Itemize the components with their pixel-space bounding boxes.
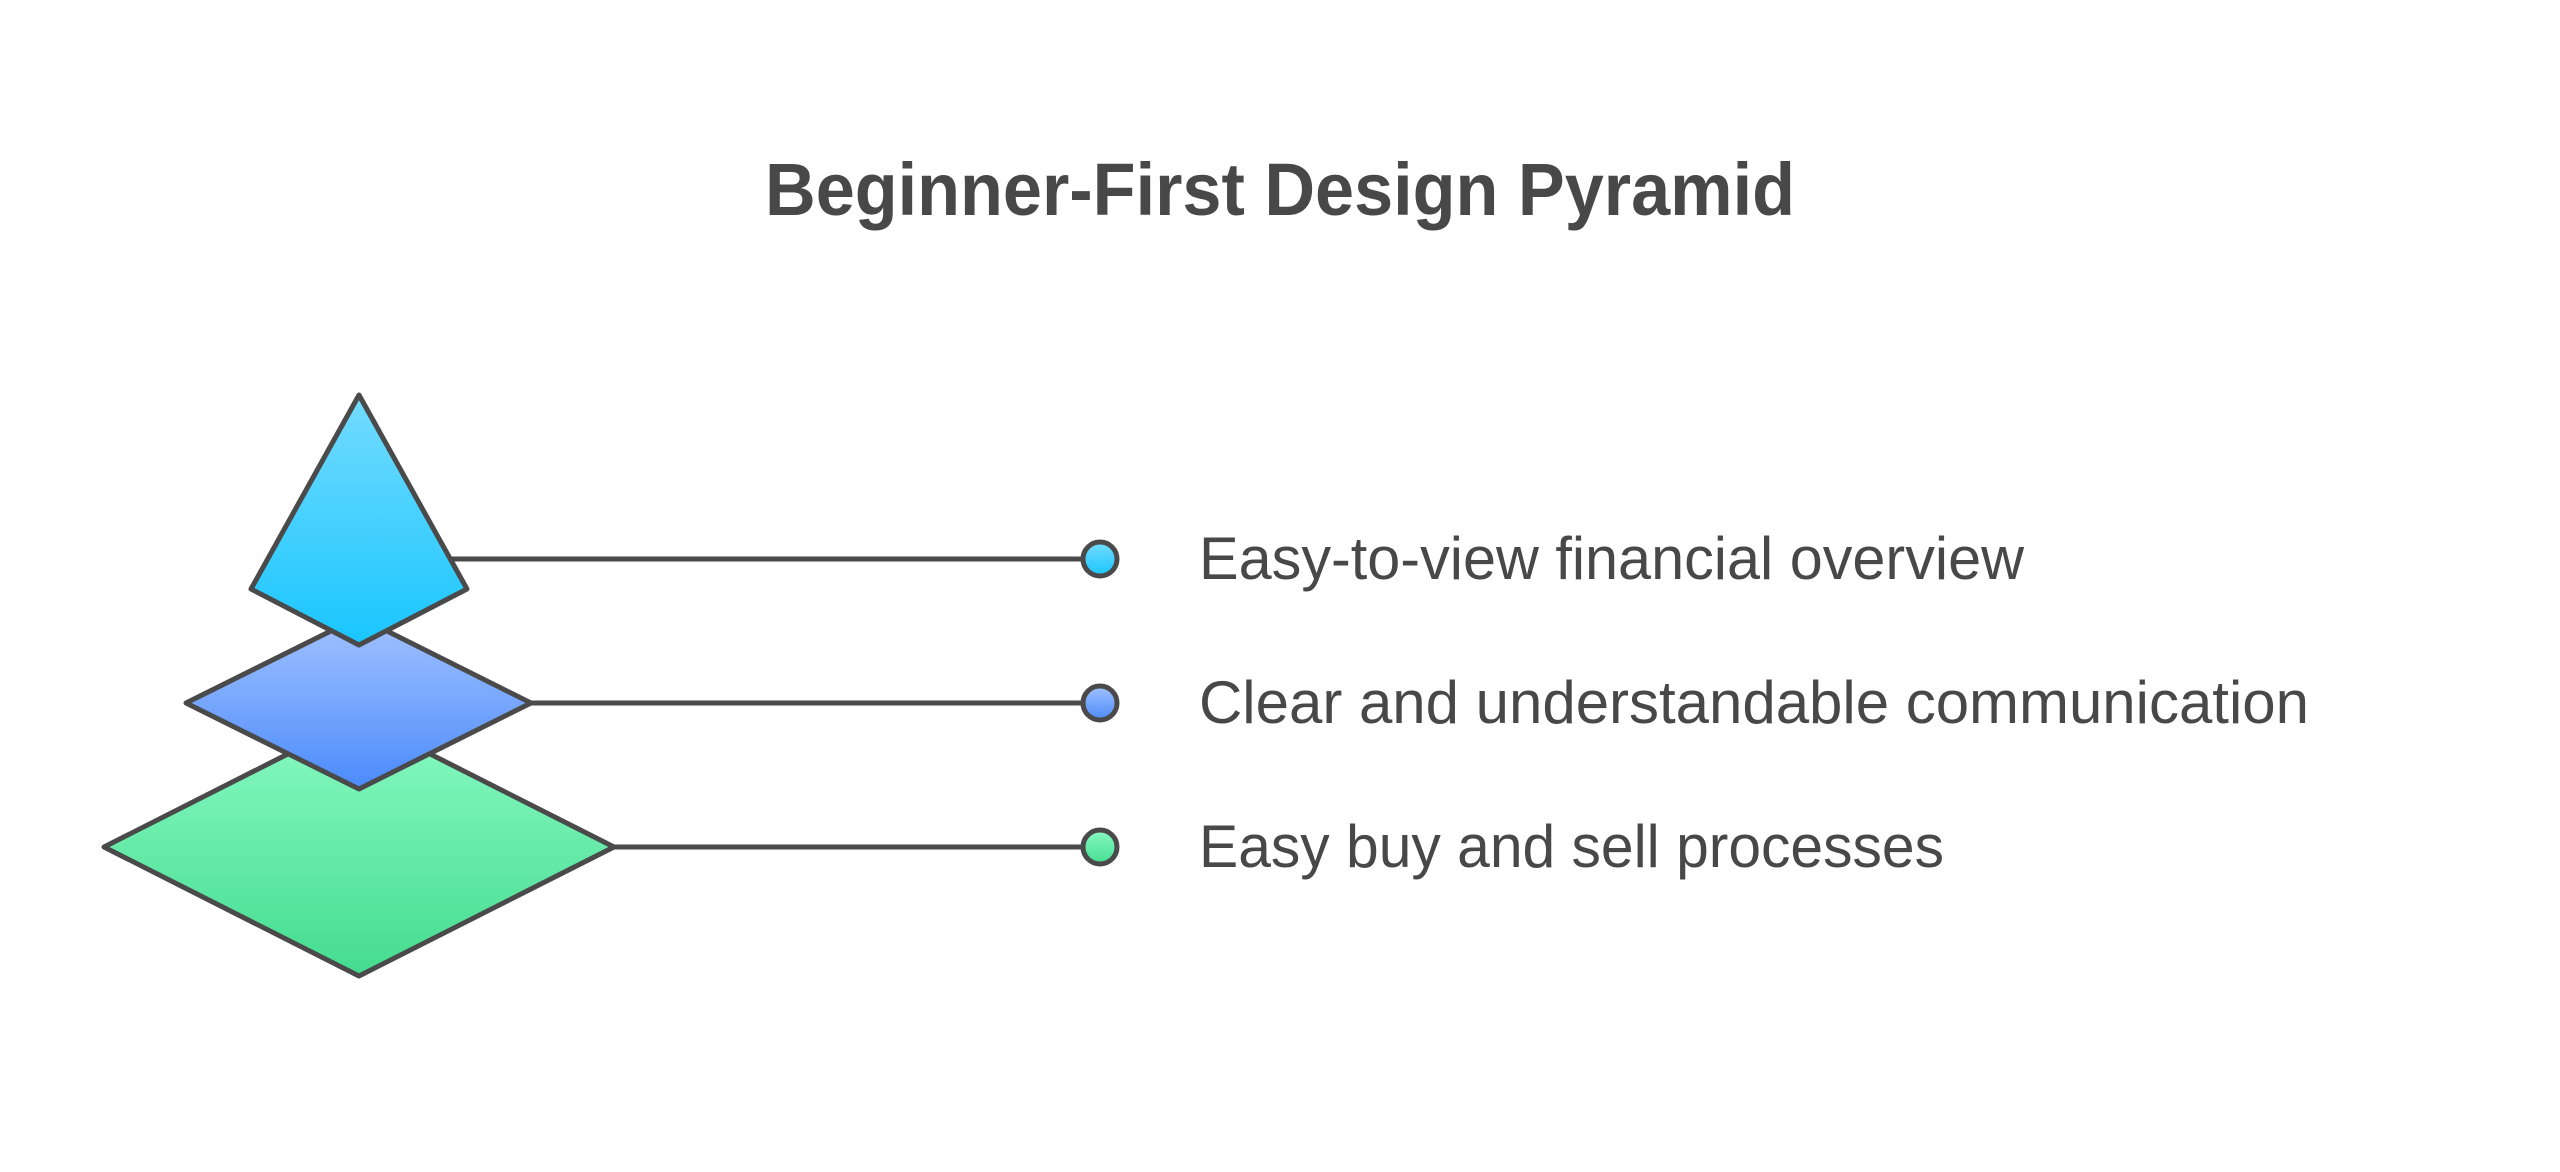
pyramid layer: middle diamond (186, 617, 531, 789)
dot: top (1083, 542, 1117, 576)
label: top: Easy-to-view financial overview (1199, 525, 2025, 592)
dot: bottom (1083, 830, 1117, 864)
label: middle: Clear and understandable communication (1199, 669, 2309, 736)
connector lines (440, 559, 1083, 847)
label: bottom: Easy buy and sell processes (1199, 813, 1944, 880)
pyramid layer: bottom diamond (104, 718, 614, 976)
pyramid layer: top triangle (251, 395, 467, 645)
title: Beginner-First Design Pyramid (765, 148, 1795, 231)
dot: middle (1083, 686, 1117, 720)
